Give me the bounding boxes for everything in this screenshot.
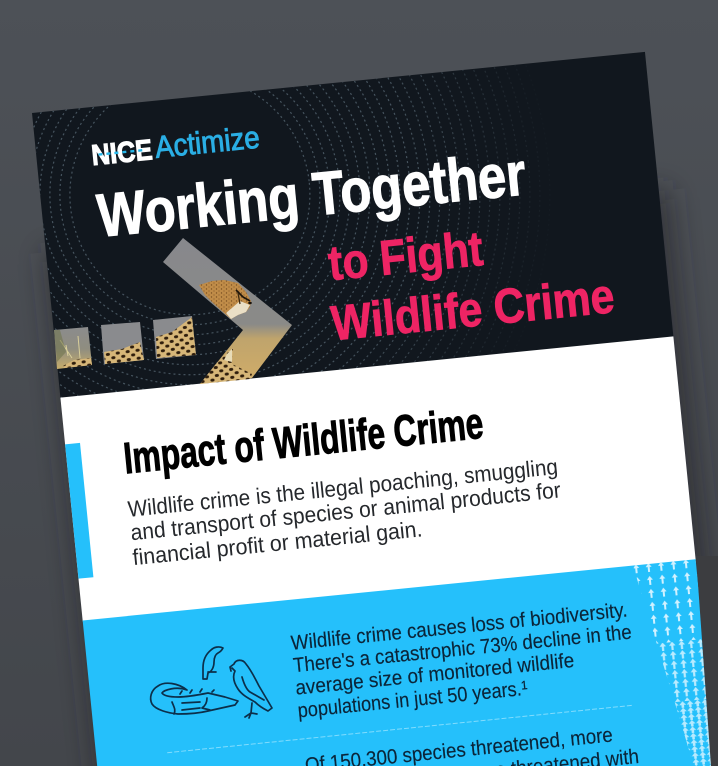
arrow pattern bbox=[633, 559, 718, 766]
photo chevron with cheetah bbox=[163, 238, 292, 384]
photo square 1 bbox=[54, 327, 92, 369]
fact text: biodiversity: Wildlife crime causes loss of biodiversity. bbox=[290, 598, 628, 655]
logo: NICE Actimize bbox=[90, 120, 261, 172]
toucan bbox=[203, 647, 223, 679]
page shadow bbox=[46, 190, 718, 766]
panel: header bbox=[32, 52, 674, 398]
logo: NICE Actimize: Actimize bbox=[153, 120, 261, 165]
photo square 2 bbox=[101, 322, 144, 364]
crocodile bbox=[151, 683, 238, 714]
divider bbox=[167, 705, 633, 753]
heading: Impact of Wildlife Crime: Impact of Wildlife Crime bbox=[121, 399, 485, 483]
cheetah head bbox=[199, 280, 251, 319]
photo square 3 bbox=[153, 316, 196, 359]
intro paragraph: and transport of species or animal products for bbox=[129, 477, 562, 545]
panel: blue facts bbox=[83, 559, 718, 766]
eagle bbox=[230, 660, 272, 718]
fact text: biodiversity: There's a catastrophic 73% decline in the bbox=[292, 621, 633, 677]
title: Working Together: Working Together bbox=[94, 139, 529, 250]
subtitle: Wildlife Crime: Wildlife Crime bbox=[329, 269, 617, 351]
accent bar bbox=[65, 443, 93, 579]
dotted concentric rings bbox=[34, 65, 540, 398]
right page edge correction bbox=[696, 556, 718, 766]
subtitle: to Fight: to Fight bbox=[326, 222, 485, 291]
fact text: biodiversity bbox=[290, 598, 637, 723]
fact text: biodiversity: average size of monitored wildlife bbox=[294, 649, 575, 700]
icon: crocodile, toucan and eagle bbox=[151, 647, 272, 718]
cheetah photo collage bbox=[54, 238, 292, 384]
cheetah body bbox=[200, 349, 252, 384]
logo: NICE Actimize: NICE bbox=[90, 134, 154, 172]
panel: white intro bbox=[60, 336, 696, 621]
fact text: biodiversity: populations in just 50 years.¹ bbox=[297, 677, 529, 723]
intro paragraph: Wildlife crime is the illegal poaching, smuggling bbox=[127, 454, 559, 522]
intro paragraph bbox=[127, 454, 565, 570]
intro paragraph: financial profit or material gain. bbox=[131, 516, 423, 570]
